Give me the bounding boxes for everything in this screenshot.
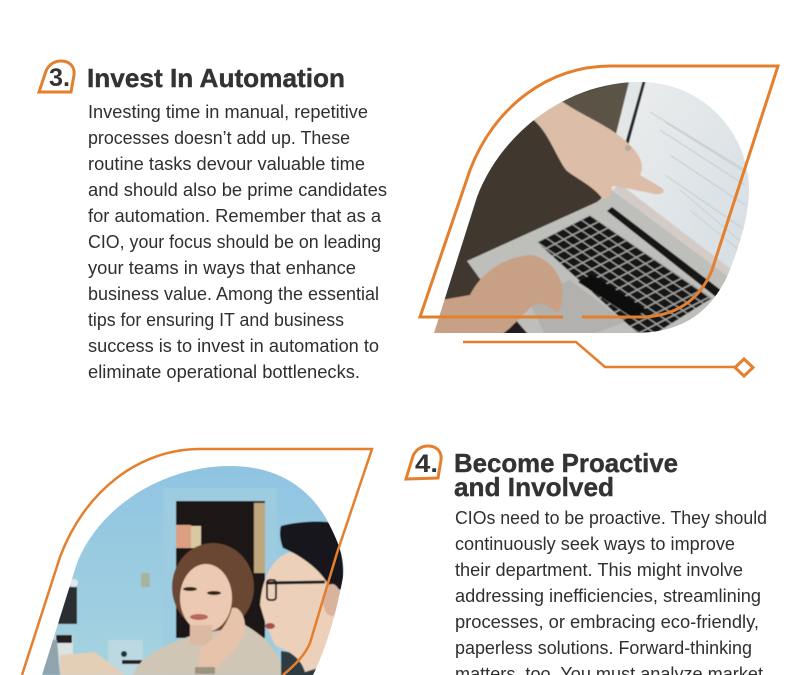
section 3 badge: 3. <box>49 64 70 92</box>
photo: two colleagues at a screen <box>30 460 350 675</box>
photo: hands pointing at laptop <box>434 82 749 333</box>
section 4 body text: their department. This might involve <box>455 560 743 580</box>
man <box>260 522 345 675</box>
orange leaf outline bottom <box>22 449 372 675</box>
bottom hand <box>434 254 563 333</box>
section 4 body text: CIOs need to be proactive. They should <box>455 508 767 528</box>
section 3 body text: tips for ensuring IT and business <box>88 310 344 330</box>
section 3 body text: business value. Among the essential <box>88 284 379 304</box>
top hand <box>530 100 664 199</box>
section 3 body text: eliminate operational bottlenecks. <box>88 362 360 382</box>
section 4 heading <box>454 448 678 502</box>
connector with diamond <box>463 342 753 376</box>
section 3 body text <box>88 102 387 382</box>
section 3 body text: and should also be prime candidates <box>88 180 387 200</box>
section 4 badge: 4. <box>415 450 438 478</box>
section 4 body text <box>455 508 767 675</box>
section 3 body text: your teams in ways that enhance <box>88 258 356 278</box>
section 3 body text: routine tasks devour valuable time <box>88 154 365 174</box>
section 4 heading: Become Proactive <box>454 448 678 478</box>
section 4 heading: and Involved <box>454 472 614 502</box>
section 3 body text: processes doesn’t add up. These <box>88 128 350 148</box>
section 3 body text: CIO, your focus should be on leading <box>88 232 381 252</box>
section 4 badge <box>406 446 441 479</box>
section 3 body text: Investing time in manual, repetitive <box>88 102 368 122</box>
section 4 body text: processes, or embracing eco-friendly, <box>455 612 759 632</box>
section 3 body text: for automation. Remember that as a <box>88 206 382 226</box>
section 4 body text: paperless solutions. Forward-thinking <box>455 638 752 658</box>
orange leaf outline top <box>420 66 778 317</box>
section 4 body text: continuously seek ways to improve <box>455 534 735 554</box>
section 4 body text: addressing inefficiencies, streamlining <box>455 586 761 606</box>
section 3 body text: success is to invest in automation to <box>88 336 379 356</box>
ring <box>625 145 631 151</box>
section 3 badge <box>39 61 74 92</box>
woman <box>133 543 282 675</box>
section 3 heading: Invest In Automation <box>87 63 345 93</box>
